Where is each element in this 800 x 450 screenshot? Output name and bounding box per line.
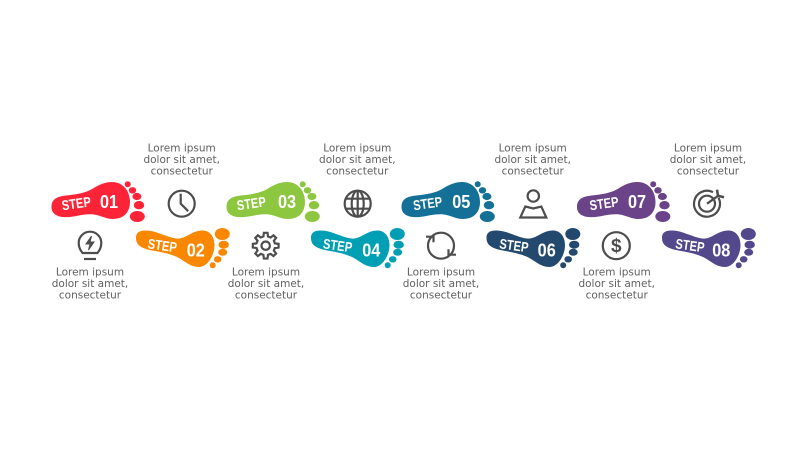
icon: light bulb with bolt [79,232,101,259]
text: step 06 description: dolor sit amet, [494,154,571,166]
step 03 footprint: 03 [278,191,296,212]
icon: target with arrow [694,190,724,217]
step 08 footprint: 08 [712,239,731,261]
text: step 05 description [403,266,479,302]
text: step 03 description: Lorem ipsum [232,266,300,278]
text: step 02 description: dolor sit amet, [143,154,220,166]
text: step 04 description [319,142,396,178]
step 08 footprint: STEP [674,236,706,256]
step 04 footprint: 04 [362,239,381,261]
step 08 footprint [662,228,756,268]
text: step 05 description: dolor sit amet, [403,278,479,290]
icon: globe [345,191,371,217]
text: step 05 description: Lorem ipsum [407,266,475,278]
text: step 01 description: Lorem ipsum [56,266,124,278]
icon: clock [169,191,195,217]
step 02 footprint [136,228,230,268]
icon: gear [253,233,279,259]
icon: refresh cycle [426,233,456,259]
step 06 footprint: 06 [538,239,556,261]
text: step 08 description: consectetur [677,166,740,178]
text: step 08 description [670,142,746,178]
step 05 footprint [402,181,495,222]
icon: dollar coin [603,232,630,259]
text: step 06 description: consectetur [502,166,564,178]
text: step 07 description: consectetur [586,290,648,302]
text: step 06 description [494,142,571,178]
text: step 07 description [578,266,655,302]
step 06 footprint [486,228,580,268]
step 05 footprint: STEP [412,194,444,214]
text: step 01 description: dolor sit amet, [52,278,128,290]
step 07 footprint [577,181,670,222]
text: step 02 description: Lorem ipsum [148,142,216,154]
text: step 01 description: consectetur [59,290,122,302]
step 07 footprint: STEP [589,194,620,214]
text: step 03 description [228,266,304,302]
step 03 footprint [226,181,320,222]
text: step 03 description: consectetur [235,290,298,302]
icon: person at desk [520,190,546,218]
text: step 02 description: consectetur [151,166,213,178]
text: step 04 description: consectetur [326,166,389,178]
step 04 footprint [311,228,405,268]
step 02 footprint: 02 [187,239,205,261]
text: step 03 description: dolor sit amet, [228,278,304,290]
step 01 footprint: STEP [61,194,92,214]
step 02 footprint: STEP [147,236,178,256]
text: step 04 description: dolor sit amet, [319,154,396,166]
text: step 07 description: dolor sit amet, [578,278,655,290]
step 04 footprint: STEP [322,236,354,256]
text: step 08 description: dolor sit amet, [670,154,746,166]
text: step 04 description: Lorem ipsum [323,142,391,154]
text: step 06 description: Lorem ipsum [499,142,567,154]
step 05 footprint: 05 [452,191,471,212]
text: step 07 description: Lorem ipsum [583,266,651,278]
icon: dollar coin: $ [611,236,622,257]
step 07 footprint: 07 [628,191,646,212]
step 01 footprint [52,181,145,222]
text: step 02 description [143,142,220,178]
step 06 footprint: STEP [498,236,530,256]
text: step 01 description [52,266,128,302]
step 03 footprint: STEP [236,194,267,214]
text: step 05 description: consectetur [410,290,473,302]
text: step 08 description: Lorem ipsum [674,142,742,154]
step 01 footprint: 01 [100,191,118,212]
